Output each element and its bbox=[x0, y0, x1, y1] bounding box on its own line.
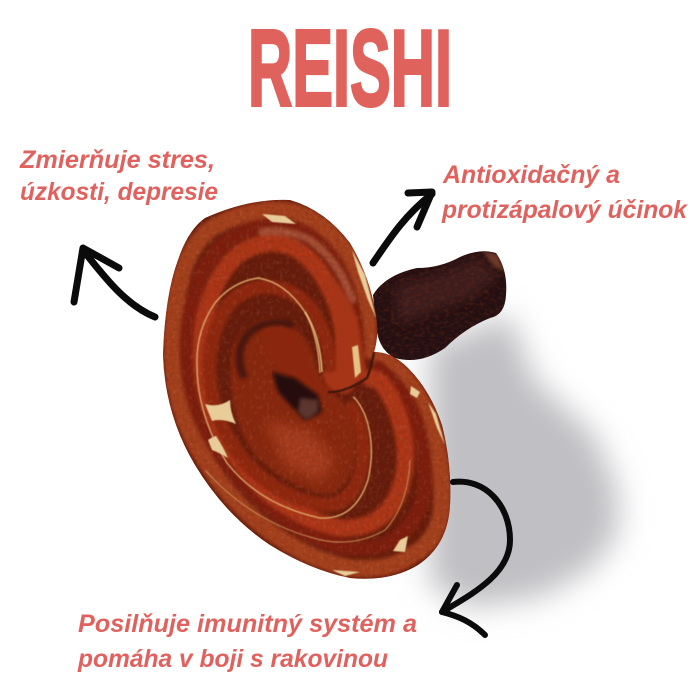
label: immune system: pomáha v boji s rakovinou bbox=[77, 645, 388, 673]
upper lobe fold bbox=[239, 272, 374, 392]
upper lobe highlight bbox=[262, 231, 352, 300]
label: immune system bbox=[77, 610, 417, 673]
arrow: to antioxidant label bbox=[373, 192, 432, 263]
mushroom stem bbox=[373, 251, 506, 360]
label: stress: Zmierňuje stres, bbox=[19, 146, 215, 174]
mushroom photo illustration bbox=[150, 190, 510, 590]
cast shadow bbox=[430, 315, 618, 608]
label: stress: úzkosti, depresie bbox=[20, 178, 218, 206]
cap cream ring bbox=[197, 278, 371, 518]
cap band outer bbox=[172, 210, 442, 569]
title: REISHI bbox=[248, 8, 452, 130]
arrow: to immune label bbox=[442, 482, 510, 635]
label: immune system: Posilňuje imunitný systém a bbox=[78, 610, 417, 638]
stipe centre depression bbox=[272, 372, 322, 420]
label: antioxidant: Antioxidačný a bbox=[442, 161, 620, 189]
label: antioxidant bbox=[441, 161, 688, 224]
cap centre tone bbox=[231, 318, 356, 495]
cream patches bbox=[205, 214, 445, 576]
label: stress bbox=[19, 146, 218, 206]
mushroom cap bbox=[163, 200, 450, 579]
arrow: to stress label bbox=[74, 248, 155, 317]
label: antioxidant: protizápalový účinok bbox=[441, 196, 688, 224]
